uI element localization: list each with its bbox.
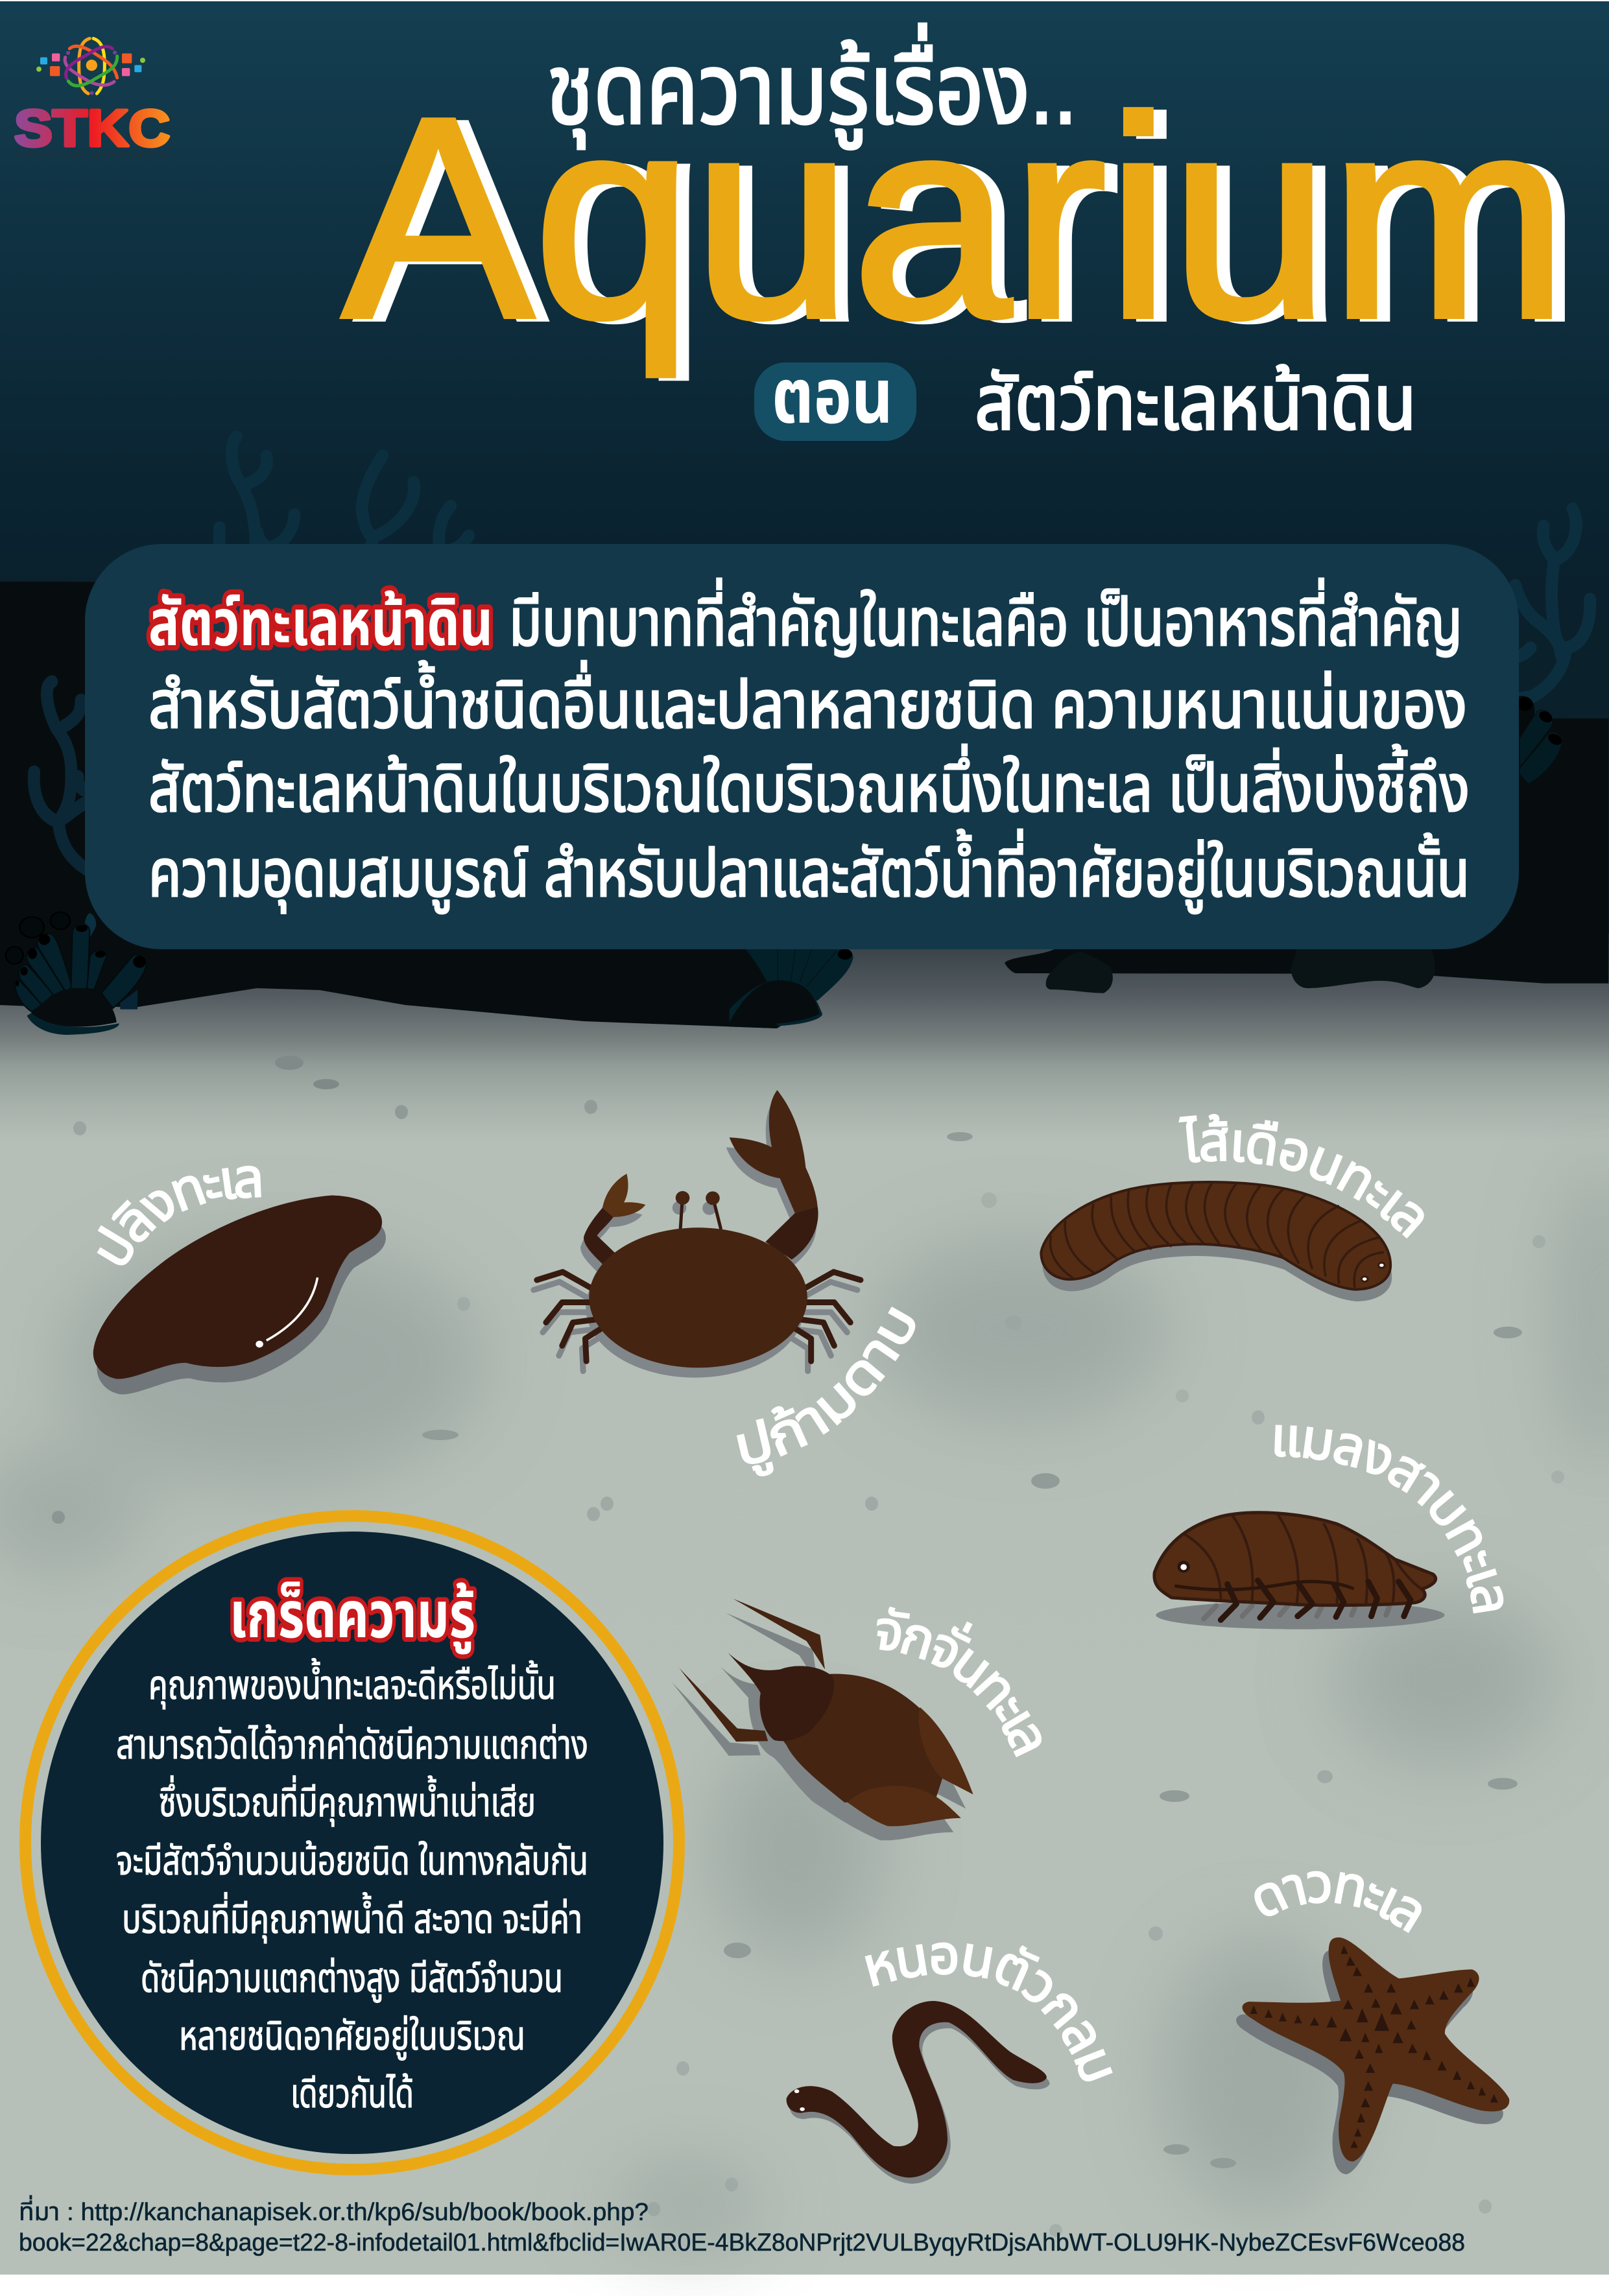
label: sea cucumber: ปลิงทะเล <box>97 1166 261 1266</box>
source citation: book=22&chap=8&page=t22-8-infodetail01.html&fbclid=IwAR0E-4BkZ8oNPrjt2VULByqyRtDjsAhbWT-OLU9HK-NybeZCEsvF6Wceo88 <box>19 2229 1465 2256</box>
animal: sea cucumber <box>93 1196 386 1395</box>
callout heading: เกร็ดความรู้ <box>230 1579 475 1654</box>
back tubes <box>6 912 70 964</box>
label: sea slater: แมลงสาบทะเล <box>1274 1425 1503 1613</box>
label: starfish: ดาวทะเล <box>1254 1871 1422 1934</box>
animal: sea slater <box>1154 1513 1444 1629</box>
callout text: ซึ่งบริเวณที่มีคุณภาพน้ำเน่าเสีย <box>159 1775 536 1827</box>
subtitle: สัตว์ทะเลหน้าดิน <box>975 361 1416 446</box>
pebbles <box>52 1056 1564 2237</box>
sea floor: soft shading <box>0 1161 1609 2243</box>
heading: Aquarium <box>342 59 1581 381</box>
source citation <box>19 2195 1465 2256</box>
rocks: dark silhouettes <box>0 582 1608 1028</box>
callout text: สามารถวัดได้จากค่าดัชนีความแตกต่าง <box>116 1723 588 1768</box>
heading shadow: Aquarium <box>355 62 1581 381</box>
heading: series title: ชุดความรู้เรื่อง.. <box>547 23 1077 149</box>
label: roundworm: หนอนตัวกลม <box>865 1943 1113 2081</box>
callout text: ดัชนีความแตกต่างสูง มีสัตว์จำนวน <box>141 1956 563 2003</box>
logo tagline: Science and Technology Knowledge Center <box>14 151 171 158</box>
background: deep water <box>0 1 1609 974</box>
coral: left on rock <box>34 681 86 870</box>
source citation: ที่มา : http://kanchanapisek.or.th/kp6/sub/book/book.php? <box>19 2195 649 2226</box>
callout text: คุณภาพของน้ำทะเลจะดีหรือไม่นั้น <box>149 1658 556 1709</box>
animal: water bug <box>672 1598 973 1840</box>
logo icon: atom <box>36 38 145 95</box>
animal: sea worm <box>1041 1181 1392 1301</box>
pill: episode tag <box>754 354 916 441</box>
sponge: right tubes <box>1518 696 1564 784</box>
heading fill: Aquarium <box>342 59 1568 379</box>
callout text: บริเวณที่มีคุณภาพน้ำดี สะอาด จะมีค่า <box>122 1892 582 1943</box>
label: water bug: จักจั่นทะเล <box>877 1607 1042 1757</box>
panel: introduction <box>85 544 1519 949</box>
pill text: ตอน <box>772 354 893 440</box>
sponge: left cluster <box>6 912 146 1035</box>
callout text: จะมีสัตว์จำนวนน้อยชนิด ในทางกลับกัน <box>116 1839 588 1884</box>
highlighted term: สัตว์ทะเลหน้าดิน <box>149 587 493 659</box>
animal: crab <box>534 1090 861 1378</box>
animal: starfish <box>1236 1937 1509 2174</box>
logo wordmark: STKC <box>14 99 170 157</box>
label: sea worm: ไส้เดือนทะเล <box>1178 1114 1424 1238</box>
label: crab: ปูก้ามดาบ <box>737 1307 916 1476</box>
background: right coral silhouette <box>1516 509 1590 699</box>
logo: STKC <box>14 38 171 158</box>
animal: roundworm <box>787 2001 1050 2184</box>
callout text: เดียวกันได้ <box>291 2072 414 2116</box>
sponge: centre dome <box>730 949 853 1028</box>
callout text <box>116 1658 588 2116</box>
sea floor <box>0 934 1609 2275</box>
rocks: lighter boulders <box>1046 949 1435 993</box>
callout: knowledge circle <box>25 1516 679 2170</box>
background: top coral silhouettes <box>219 436 469 553</box>
callout text: หลายชนิดอาศัยอยู่ในบริเวณ <box>179 2014 525 2061</box>
